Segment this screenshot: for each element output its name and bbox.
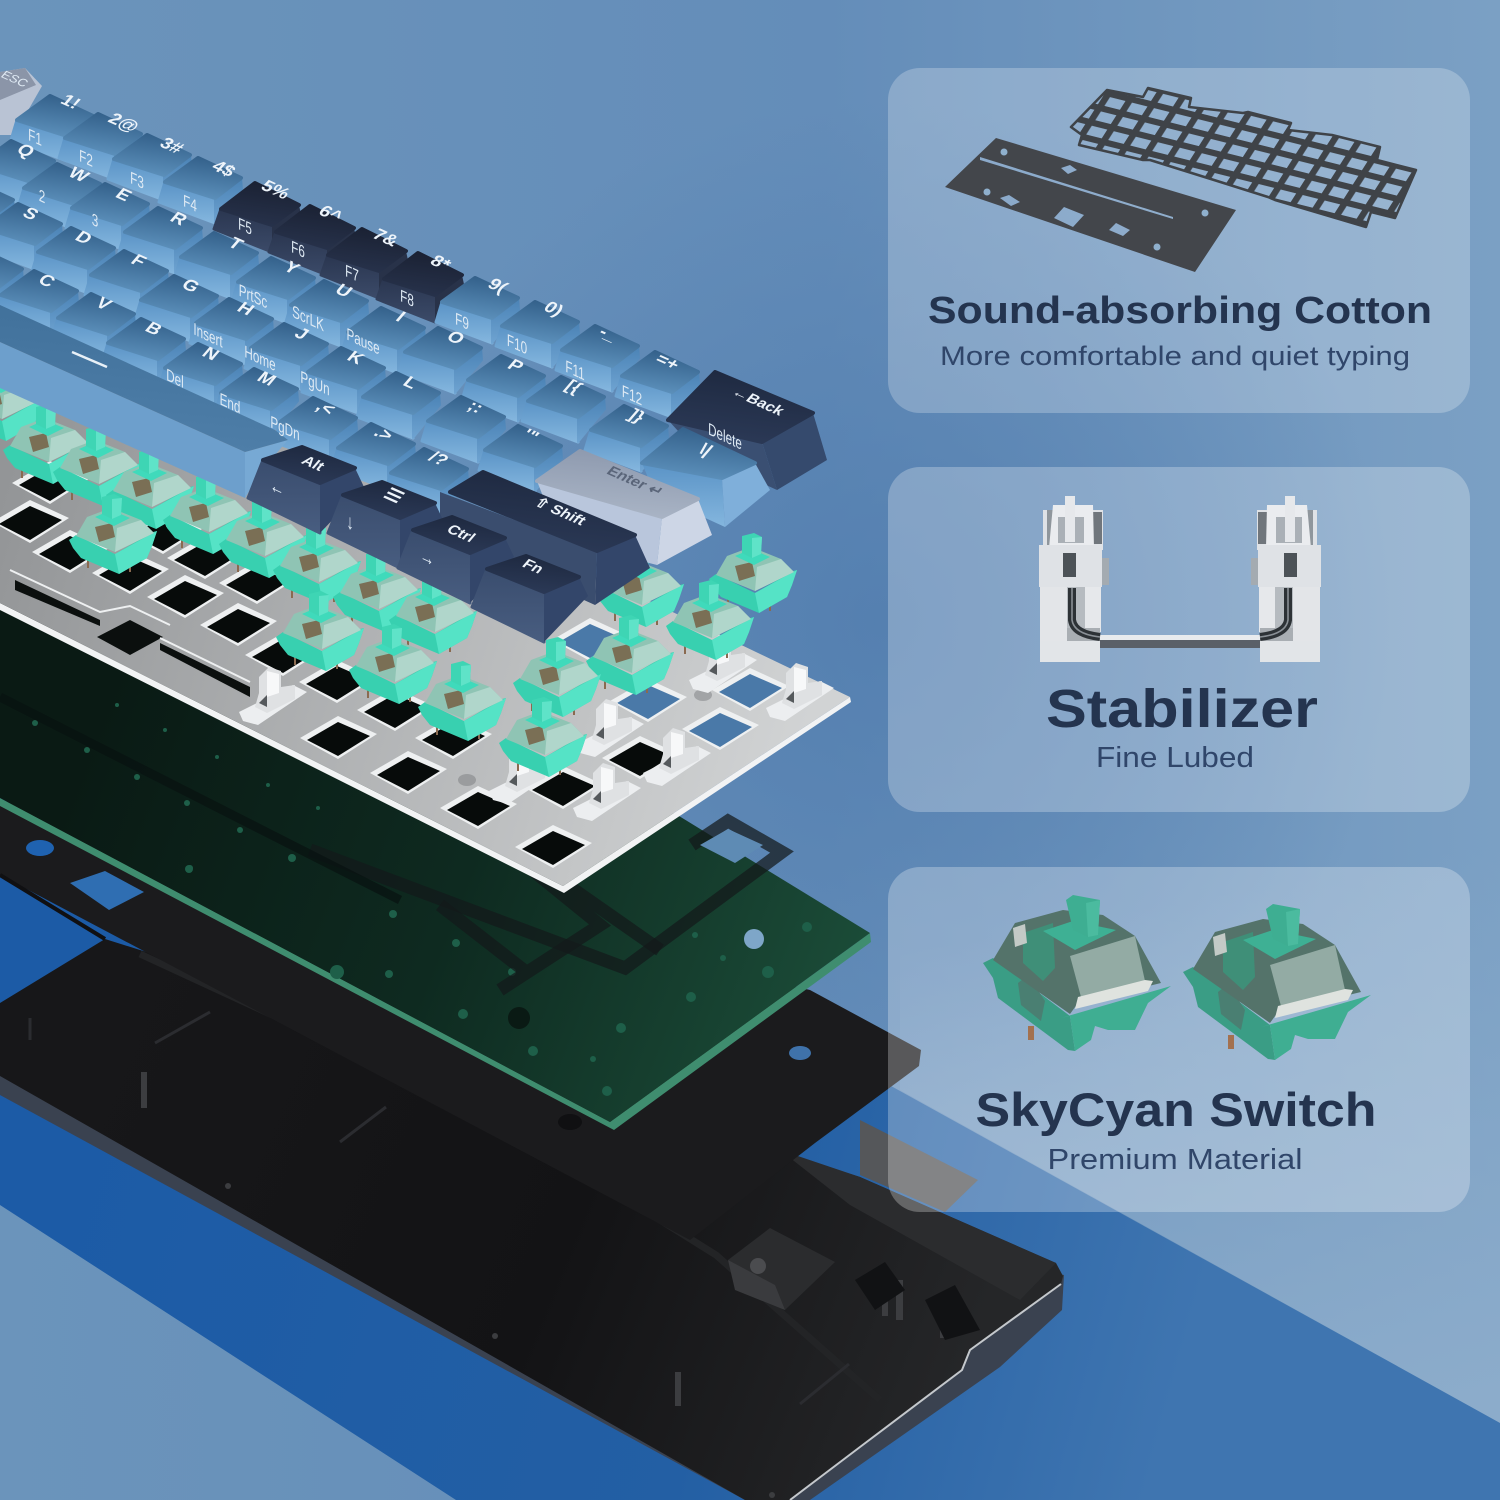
q row <box>0 141 770 527</box>
green PCB <box>0 400 871 1130</box>
top legends: ,< <box>312 397 339 418</box>
side legends: Insert <box>193 320 223 353</box>
side legends: F12 <box>622 382 642 410</box>
top legends: 4$ <box>208 157 240 180</box>
top legends: '" <box>518 426 543 446</box>
top legends: T <box>224 234 247 253</box>
mechanical switches <box>0 361 797 777</box>
top legends: Ctrl <box>443 522 479 545</box>
top legends <box>13 91 788 577</box>
side legends: Delete <box>708 420 742 454</box>
top legends: K <box>343 348 368 368</box>
a row <box>0 180 562 491</box>
top legends: N <box>198 344 223 364</box>
plate stabilizers <box>239 635 834 821</box>
top legends: V <box>92 294 116 313</box>
side legends: F6 <box>291 237 305 263</box>
side legends: F9 <box>455 309 469 335</box>
heading: SkyCyan Switch <box>976 1083 1376 1136</box>
top legends: S <box>19 204 43 223</box>
icon: cotton pad with cutouts <box>945 138 1236 272</box>
top legends: L <box>399 373 422 392</box>
top legends: Enter ↵ <box>603 464 667 500</box>
top legends: Fn <box>519 557 547 577</box>
top legends: [{ <box>561 377 586 397</box>
top legends: R <box>166 209 191 229</box>
top legends: 8* <box>426 252 456 274</box>
top legends: \| <box>695 440 717 459</box>
inner ridge <box>140 954 880 1400</box>
enter key <box>537 451 712 565</box>
panel: stabilizer <box>888 467 1470 812</box>
side legends: Home <box>244 342 276 376</box>
top legends: -_ <box>595 323 624 345</box>
top legends: 1! <box>57 91 85 112</box>
top legends: H <box>233 299 258 319</box>
top legends: F <box>127 251 150 270</box>
side legends: 3 <box>92 210 98 232</box>
side legends: ↓ <box>346 508 354 535</box>
top legends: D <box>71 228 96 248</box>
top legends: B <box>141 319 166 339</box>
side legends: F1 <box>28 125 42 151</box>
side legends <box>28 125 742 572</box>
side legends: PgDn <box>270 413 300 445</box>
top legends: ]} <box>624 406 649 426</box>
top legends: 9( <box>484 275 513 297</box>
top legends: 2@ <box>104 109 143 136</box>
side legends: ScrLK <box>292 302 324 336</box>
top legends: .> <box>370 423 397 444</box>
top legends: Y <box>280 258 304 277</box>
side legends: End <box>220 390 240 418</box>
top legends: Alt <box>298 453 328 474</box>
heading: Stabilizer <box>1046 679 1318 739</box>
top legends: 7& <box>369 225 403 250</box>
side legends: → <box>420 542 434 572</box>
top legends: 0) <box>540 298 568 319</box>
top legends: I <box>392 308 409 325</box>
top legends: 6^ <box>315 202 347 225</box>
caption: More comfortable and quiet typing <box>940 341 1410 371</box>
caption: Premium Material <box>1048 1144 1302 1176</box>
black foam plate <box>0 800 921 1240</box>
icon: cotton grid <box>1071 88 1416 227</box>
pcb holes <box>32 703 812 1096</box>
case ribs <box>30 1012 849 1404</box>
case posts <box>141 1072 946 1498</box>
panel: sound-absorbing cotton <box>888 68 1470 413</box>
top legends: M <box>253 368 280 389</box>
plate holes <box>0 461 789 868</box>
silver switch plate <box>0 290 851 893</box>
number row <box>11 96 827 490</box>
top legends: W <box>64 164 94 186</box>
side legends: F3 <box>130 168 144 194</box>
top legends: Q <box>13 140 39 161</box>
side legends: F5 <box>238 214 252 240</box>
top legends: /? <box>425 448 453 469</box>
icon: switches <box>983 895 1371 1060</box>
top legends: O <box>443 327 469 348</box>
top legends: U <box>331 281 356 301</box>
bottom modifier keys <box>248 447 588 642</box>
side legends: Pause <box>346 325 380 359</box>
side legends: ← <box>270 472 284 502</box>
long stabilizer slot <box>10 570 250 697</box>
side legends: F4 <box>183 191 197 217</box>
side legends: 2 <box>39 186 45 208</box>
top legends: =+ <box>652 350 684 373</box>
connector box <box>728 1228 980 1340</box>
side legends: PrtSc <box>239 281 268 313</box>
side legends: F8 <box>400 286 414 312</box>
top legends: J <box>291 324 313 343</box>
foam frame shadow on pcb <box>0 697 782 990</box>
z row <box>0 249 468 514</box>
keyboard bottom case <box>0 939 1064 1500</box>
top legends: ☰ <box>380 485 408 506</box>
top legends: ⇧ Shift <box>530 495 589 529</box>
panel: skycyan switch <box>888 867 1470 1212</box>
side legends: Del <box>166 365 184 393</box>
top legends: ←Back <box>728 385 788 419</box>
side legends: F10 <box>507 331 527 359</box>
top legends: G <box>178 275 204 296</box>
caption: Fine Lubed <box>1096 742 1254 774</box>
space bar <box>0 305 288 498</box>
top legends: 5% <box>257 177 294 202</box>
top legends: C <box>34 271 59 291</box>
side legends: F2 <box>79 146 93 172</box>
top legends: 3# <box>156 134 188 157</box>
top legends: P <box>504 356 528 375</box>
heading: Sound-absorbing Cotton <box>928 290 1432 332</box>
top legends: E <box>112 185 136 204</box>
esc key <box>0 68 42 135</box>
shift key <box>440 472 650 605</box>
side legends: F11 <box>565 357 585 385</box>
keycaps <box>0 68 827 642</box>
side legends: PgUn <box>300 368 330 400</box>
icon: stabilizer <box>1039 496 1321 662</box>
top legends: ;: <box>464 397 488 416</box>
side legends: F7 <box>345 261 359 287</box>
